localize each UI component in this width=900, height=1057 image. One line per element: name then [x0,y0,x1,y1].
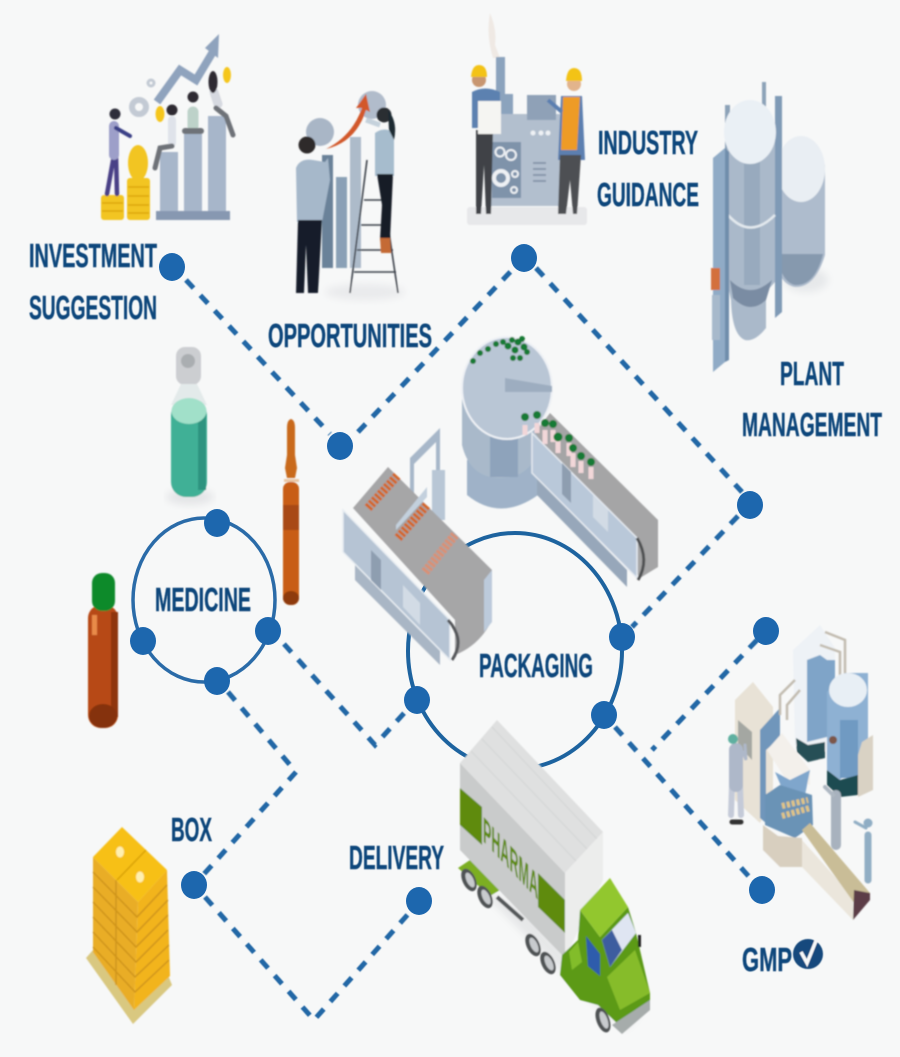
beige base [763,825,802,867]
lower rail [355,563,440,665]
workers [731,745,868,880]
label: plant management [742,355,882,443]
trailer side [460,763,565,958]
conveyor belt [535,413,658,578]
label: plant management: PLANT [780,355,844,392]
ground [467,207,587,225]
illustration: plant management [711,82,828,372]
output conveyor [802,840,853,920]
gears [132,80,154,114]
chimney [496,57,505,117]
person standing [107,126,130,194]
illustration: GMP factory [728,625,873,920]
illustration: stacked boxes on pallet [86,827,172,1024]
shadow [470,880,640,1030]
illustration: pharma truck [458,720,650,1034]
tank two [827,673,868,780]
front wheel [592,1006,614,1034]
drum base [467,460,538,508]
label: investment suggestion: INVESTMENT [29,237,157,274]
node dots [130,244,779,915]
label: investment suggestion [29,237,157,326]
illustration: ampoule filling conveyor [343,428,492,665]
illustration: capping machine and conveyor [462,336,658,587]
box strapping [93,872,169,992]
piping [780,632,845,720]
front column [713,148,725,372]
lower rail [537,478,627,587]
main tank [727,130,775,340]
green capped bottles: hopper [470,336,530,364]
blue housing [760,708,780,823]
trailer top [460,720,603,873]
gear circles [306,118,334,146]
drum body [462,385,540,478]
belt [353,467,492,655]
smoke [489,13,500,58]
green bands [460,788,482,845]
rear tank [784,268,828,292]
right face [134,870,170,1010]
top face [93,827,167,902]
growth arrow [157,34,219,102]
label: industry guidance: GUIDANCE [597,176,699,213]
label: investment suggestion: SUGGESTION [29,289,157,326]
machine [490,114,560,206]
idea bulbs [156,67,231,122]
engineer with paper [472,88,500,128]
bars [322,155,333,268]
bar chart [160,116,226,212]
trailer end [565,832,603,958]
windshield [602,913,636,967]
green capped bottles: conveyor [525,423,591,479]
rear wheels and chassis [497,897,523,920]
tank one [793,625,835,760]
illustration: amber bottle [88,573,118,728]
label: packaging: PACKAGING [479,647,593,684]
conveyor side panel [532,433,637,578]
cab roof [580,878,628,937]
label: industry guidance: INDUSTRY [598,124,698,161]
illustration: opportunities [296,91,405,300]
engineer in vest [558,96,585,160]
beige wall [735,682,773,823]
man [296,158,330,222]
label: industry guidance [597,124,699,213]
label: box: BOX [171,811,212,848]
cab body [560,907,650,1028]
woman [375,130,394,176]
blue octagon filler [765,785,813,838]
pallet [86,950,172,1024]
white platform [767,733,810,785]
illustration: industry guidance [467,13,587,225]
coin stacks [101,145,150,220]
ampoule rows [368,475,427,538]
illustration: pharma truck: PHARMA [483,808,538,908]
left face [93,857,138,1010]
label: medicine: MEDICINE [155,581,251,618]
illustration: vial [166,347,214,505]
dashed connector network [186,268,757,1020]
side panel [343,510,450,660]
hood [607,950,650,1010]
seated people [155,92,233,168]
label: delivery: DELIVERY [349,839,444,876]
ladder [350,160,398,293]
rising arrow [326,94,370,149]
icon: GMP check badge [793,931,823,969]
label: opportunities: OPPORTUNITIES [268,317,432,354]
medicine ring [133,518,275,682]
illustration: investment suggestion [101,34,233,220]
illustration: ampoule [283,419,299,605]
drum top [462,337,552,439]
label: GMP: GMP [742,941,792,978]
packaging ring [408,533,622,769]
rear column [775,96,782,318]
filling frame [410,428,440,500]
floor shadow [325,284,405,300]
